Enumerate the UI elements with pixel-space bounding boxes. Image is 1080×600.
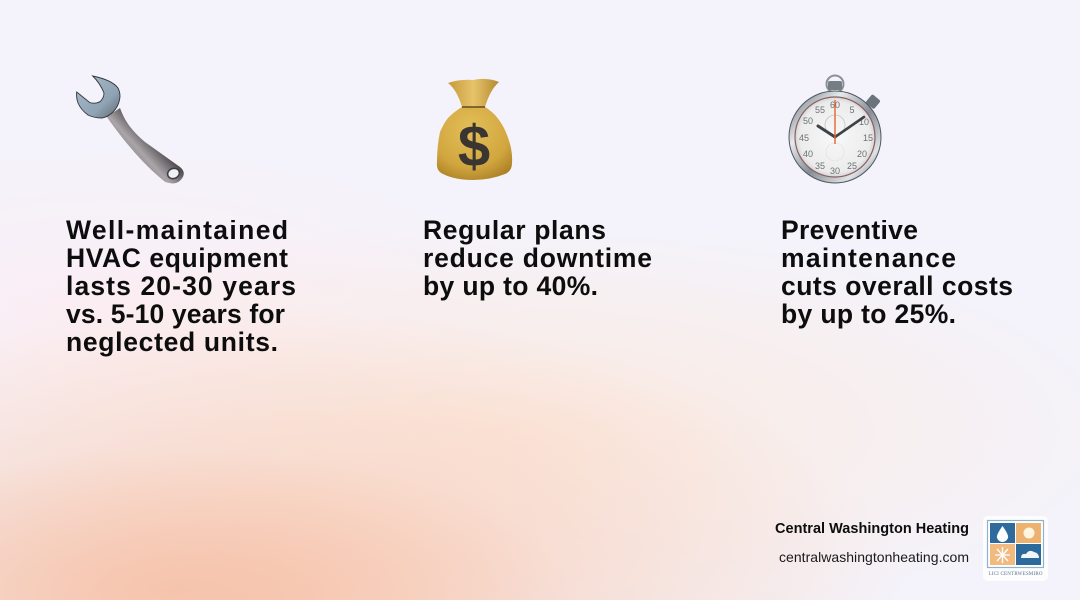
icon: stopwatch: 10 [859, 117, 869, 127]
text: lifespan statement: vs. 5-10 years for [66, 299, 285, 329]
icon: stopwatch: 55 [815, 105, 825, 115]
text: downtime statement [423, 220, 652, 301]
icon: stopwatch: 35 [815, 161, 825, 171]
text: cost statement: by up to 25%. [781, 299, 956, 329]
icon: stopwatch: 30 [830, 166, 840, 176]
icon: money bag [436, 78, 512, 180]
icon: stopwatch: 50 [803, 116, 813, 126]
icon: wrench [76, 75, 184, 184]
text: lifespan statement [66, 220, 296, 357]
text: lifespan statement: lasts 20-30 years [66, 271, 296, 301]
text: lifespan statement: HVAC equipment [66, 243, 288, 273]
panel: downtime reduction [423, 78, 652, 301]
text: lifespan statement: neglected units. [66, 327, 278, 357]
text: cost statement: cuts overall costs [781, 271, 1013, 301]
footer: company brand [775, 516, 1048, 581]
panel: equipment lifespan [66, 75, 296, 357]
text: cost statement: maintenance [781, 243, 956, 273]
panel: cost savings [781, 74, 1013, 329]
text: downtime statement: by up to 40%. [423, 271, 598, 301]
logo: LICI CENTRWESMIRO [988, 572, 1043, 577]
icon: stopwatch: 15 [863, 133, 873, 143]
icon: stopwatch [788, 74, 882, 184]
logo [983, 516, 1048, 581]
icon: stopwatch: 45 [799, 133, 809, 143]
icon: stopwatch: 60 [830, 100, 840, 110]
text: downtime statement: reduce downtime [423, 243, 652, 273]
icon: stopwatch: 20 [857, 149, 867, 159]
icon: money bag: $ [458, 114, 490, 179]
icon: stopwatch: 25 [847, 161, 857, 171]
icon: stopwatch: 5 [849, 105, 855, 115]
website url: centralwashingtonheating.com [779, 549, 969, 565]
company name: Central Washington Heating [775, 521, 969, 537]
text: cost statement [781, 220, 1013, 329]
icon: stopwatch: 40 [803, 149, 813, 159]
